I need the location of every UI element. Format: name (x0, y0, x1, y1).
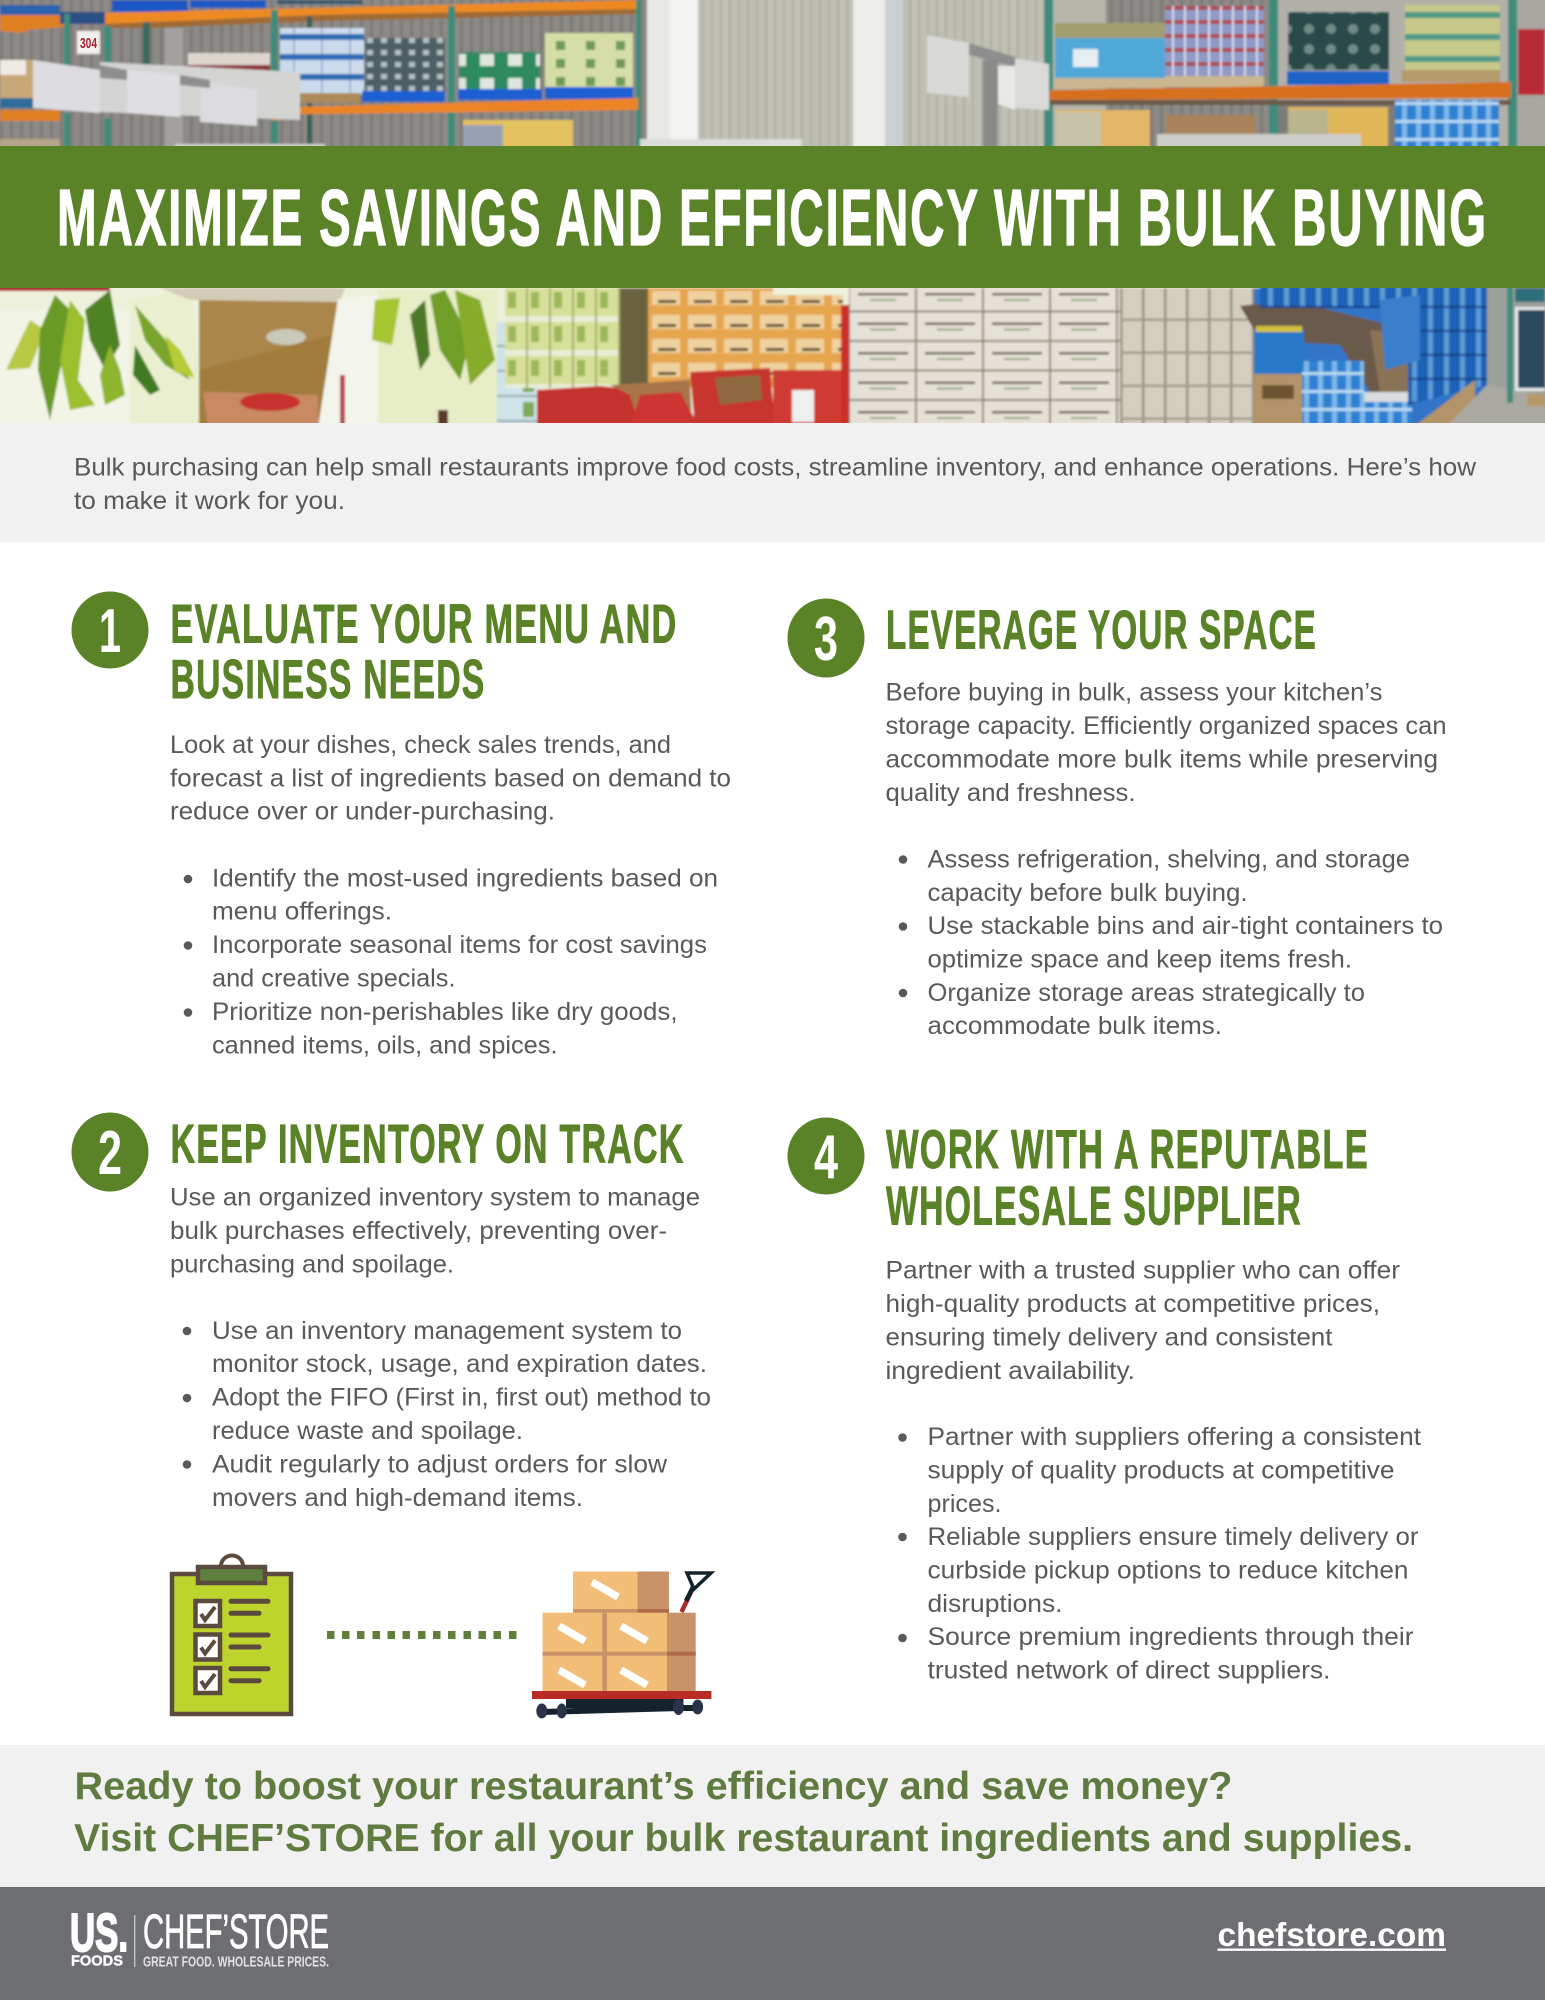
list: step 3 bullets: Assess refrigeration, shelving, and storage (928, 846, 1410, 873)
paragraph: step 4 intro: ensuring timely delivery and consistent (886, 1324, 1333, 1351)
list: step 2 bullets: movers and high-demand items. (212, 1485, 583, 1512)
list: step 2 bullets: Audit regularly to adjust orders for slow (212, 1451, 667, 1478)
list: step 4 bullets: disruptions. (928, 1591, 1062, 1618)
heading: work with a reputable wholesale supplier: WHOLESALE SUPPLIER (886, 1174, 1302, 1236)
list: step 2 bullets (183, 1318, 711, 1512)
badge: number 2 (72, 1112, 148, 1192)
paragraph: step 2 intro: purchasing and spoilage. (170, 1251, 454, 1278)
list: step 4 bullets: Source premium ingredients through their (928, 1624, 1414, 1651)
paragraph: step 2 intro: Use an organized inventory system to manage (170, 1185, 700, 1212)
logo: US Foods Chef'Store (70, 1903, 329, 1970)
heading: evaluate your menu (170, 593, 678, 710)
icon: boxes on pallet cart (532, 1572, 711, 1718)
list: step 2 bullets: reduce waste and spoilage. (212, 1418, 523, 1445)
list: step 4 bullets (898, 1424, 1421, 1685)
intro band: to make it work for you. (74, 488, 345, 515)
list: step 1 bullets: and creative specials. (212, 966, 456, 992)
title banner (0, 146, 1545, 288)
badge: number 3: 3 (814, 605, 838, 674)
paragraph: step 3 intro: accommodate more bulk items while preserving (886, 746, 1438, 773)
list: step 2 bullets: monitor stock, usage, and expiration dates. (212, 1351, 707, 1378)
paragraph: step 3 intro: quality and freshness. (886, 780, 1136, 807)
paragraph: step 3 intro (886, 680, 1446, 807)
list: step 1 bullets (184, 865, 718, 1059)
badge: number 4 (788, 1118, 864, 1194)
panel: step 2 keep inventory on track (72, 1112, 711, 1512)
paragraph: step 4 intro (886, 1258, 1400, 1385)
list: step 3 bullets: Use stackable bins and air-tight containers to (928, 913, 1443, 940)
badge: number 3 (788, 598, 864, 678)
badge: number 4: 4 (814, 1123, 838, 1192)
list: step 3 bullets: Organize storage areas strategically to (928, 980, 1365, 1007)
icon: clipboard checklist (172, 1556, 291, 1714)
paragraph: step 1 intro: forecast a list of ingredients based on demand to (170, 765, 731, 792)
list: step 1 bullets: canned items, oils, and spices. (212, 1032, 558, 1059)
heading: work with a reputable wholesale supplier (886, 1118, 1369, 1236)
panel: step 1 evaluate your menu (72, 592, 731, 1059)
heading: evaluate your menu: EVALUATE YOUR MENU AND (170, 593, 678, 655)
paragraph: step 3 intro: storage capacity. Efficiently organized spaces can (886, 713, 1446, 740)
list: step 4 bullets: Reliable suppliers ensure timely delivery or (928, 1524, 1418, 1551)
list: step 3 bullets (899, 846, 1443, 1040)
list: step 4 bullets: curbside pickup options to reduce kitchen (928, 1557, 1408, 1584)
call to action band: Ready to boost your restaurant’s efficiency and save money? (74, 1765, 1232, 1808)
intro band: Bulk purchasing can help small restaurants improve food costs, streamline inventory, and enhance operations. Here’s how (74, 454, 1476, 482)
badge: number 2: 2 (98, 1119, 122, 1188)
list: step 3 bullets: accommodate bulk items. (928, 1013, 1222, 1040)
list: step 1 bullets: menu offerings. (212, 899, 392, 926)
list: step 4 bullets: supply of quality products at competitive (928, 1457, 1394, 1484)
paragraph: step 1 intro (170, 732, 731, 826)
list: step 1 bullets: Identify the most-used ingredients based on (212, 865, 718, 892)
badge: number 1: 1 (99, 597, 121, 666)
list: step 2 bullets: Use an inventory management system to (212, 1318, 682, 1345)
logo: US Foods Chef'Store: US. (70, 1903, 128, 1963)
paragraph: step 1 intro: Look at your dishes, check sales trends, and (170, 732, 671, 759)
paragraph: step 4 intro: high-quality products at competitive prices, (886, 1291, 1380, 1318)
logo: US Foods Chef'Store: FOODS (71, 1954, 123, 1970)
paragraph: step 2 intro: bulk purchases effectively, preventing over- (170, 1218, 667, 1245)
paragraph: step 2 intro (170, 1185, 700, 1278)
heading: keep inventory on track: KEEP INVENTORY ON TRACK (170, 1113, 684, 1175)
list: step 4 bullets: trusted network of direct suppliers. (928, 1658, 1330, 1685)
panel: step 3 leverage your space (788, 598, 1446, 1040)
logo: US Foods Chef'Store: CHEF’STORE (143, 1906, 329, 1959)
paragraph: step 1 intro: reduce over or under-purchasing. (170, 799, 555, 826)
call to action band (0, 1745, 1545, 1887)
list: step 1 bullets: Prioritize non-perishables like dry goods, (212, 999, 678, 1026)
list: step 1 bullets: Incorporate seasonal items for cost savings (212, 932, 707, 959)
list: step 3 bullets: capacity before bulk buying. (928, 880, 1248, 907)
connector: dotted line (327, 1631, 516, 1639)
paragraph: step 3 intro: Before buying in bulk, assess your kitchen’s (886, 680, 1382, 707)
list: step 3 bullets: optimize space and keep items fresh. (928, 946, 1352, 973)
photo: bulk product stacks (0, 283, 1545, 433)
list: step 2 bullets: Adopt the FIFO (First in, first out) method to (212, 1385, 711, 1412)
list: step 4 bullets: Partner with suppliers offering a consistent (928, 1424, 1421, 1451)
badge: number 1 (72, 592, 148, 668)
list: step 4 bullets: prices. (928, 1491, 1002, 1518)
intro band (0, 423, 1545, 542)
panel: step 4 reputable wholesale supplier (788, 1118, 1421, 1685)
heading: evaluate your menu: BUSINESS NEEDS (170, 648, 486, 710)
footer bar (0, 1887, 1545, 2000)
sign: aisle number 304: 304 (80, 35, 97, 52)
call to action band: Visit CHEF’STORE for all your bulk restaurant ingredients and supplies. (74, 1817, 1413, 1860)
link: chefstore.com: chefstore.com (1218, 1916, 1446, 1953)
paragraph: step 4 intro: ingredient availability. (886, 1358, 1135, 1385)
logo: US Foods Chef'Store: GREAT FOOD. WHOLESALE PRICES. (143, 1954, 329, 1970)
photo: warehouse shelves (0, 0, 1545, 155)
paragraph: step 4 intro: Partner with a trusted supplier who can offer (886, 1258, 1400, 1285)
